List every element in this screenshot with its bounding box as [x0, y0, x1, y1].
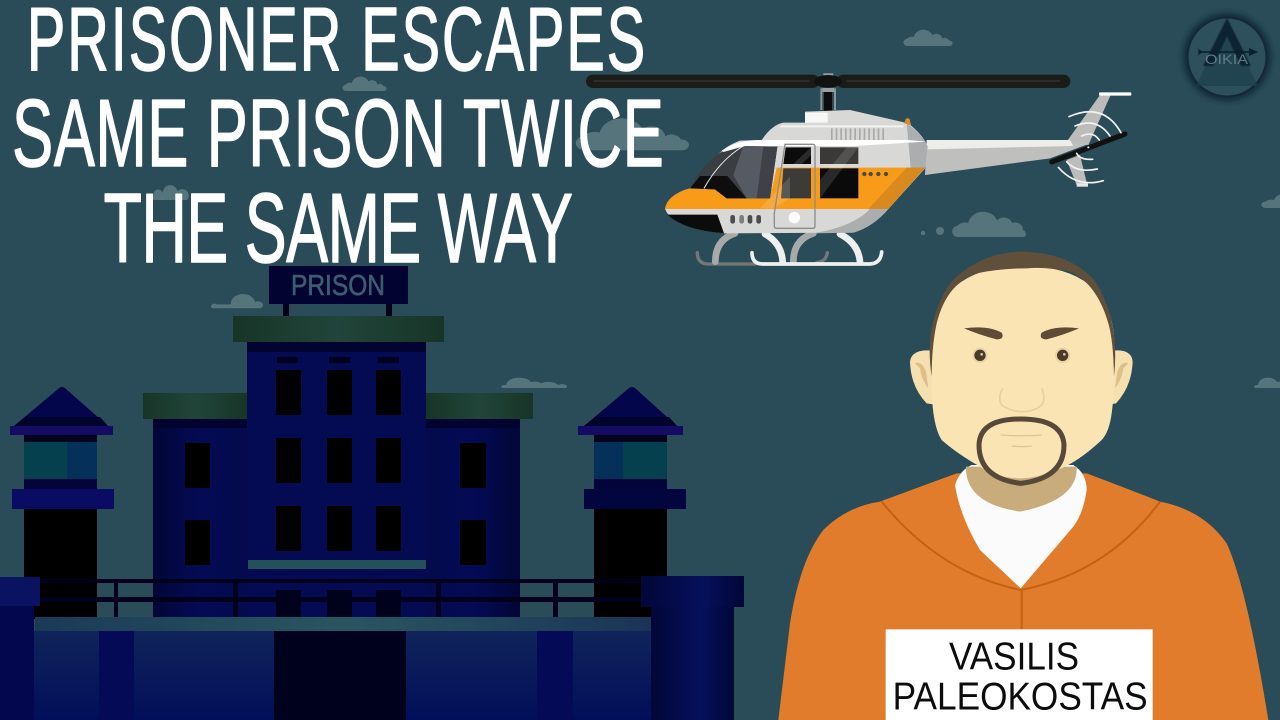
left wing: [143, 393, 247, 619]
fuselage: [665, 110, 928, 233]
outer wall with gate: [34, 617, 653, 720]
neck: [966, 467, 1077, 512]
eyebrows: [964, 327, 1079, 339]
eyes: [972, 348, 1070, 363]
landing skids: [697, 233, 882, 264]
title: THE SAME WAY: [104, 175, 573, 283]
prisoner portrait: [778, 252, 1268, 720]
prison complex: [0, 266, 744, 720]
hair: [930, 252, 1115, 377]
left watchtower: [10, 387, 114, 619]
fence: [40, 579, 641, 619]
clouds: [147, 30, 1280, 388]
windows: [783, 147, 811, 164]
central block: [233, 316, 444, 619]
orange jumpsuit: [778, 473, 1268, 720]
suit seams: [882, 502, 1160, 630]
cockpit windshield: [690, 146, 777, 198]
right wing: [426, 393, 533, 619]
tail boom and fin: [925, 92, 1131, 187]
nose: [1000, 388, 1044, 412]
name tag: PALEOKOSTAS: [893, 675, 1148, 718]
side vents: [730, 215, 761, 224]
name tag: [886, 629, 1153, 720]
mouth: [1001, 435, 1042, 447]
rivet dots: [862, 172, 888, 176]
head: [932, 266, 1115, 478]
name tag: VASILIS: [949, 635, 1079, 678]
engine cowl: [805, 113, 828, 123]
prison sign: PRISON: [291, 270, 385, 302]
prison sign: [269, 266, 408, 316]
channel logo: [1184, 14, 1270, 100]
left wall pillar: [0, 577, 40, 720]
door: [774, 144, 815, 228]
goatee: [979, 419, 1064, 483]
helicopter: [586, 73, 1131, 264]
right watchtower: [578, 387, 686, 619]
main rotor: [586, 73, 1070, 113]
title: SAME PRISON TWICE: [12, 80, 664, 187]
channel logo: OIKIA: [1205, 51, 1249, 67]
gate: [274, 631, 406, 720]
ears: [910, 350, 1133, 405]
title: [12, 0, 664, 283]
right wall pillar: [641, 576, 744, 720]
white undershirt: [955, 465, 1087, 588]
